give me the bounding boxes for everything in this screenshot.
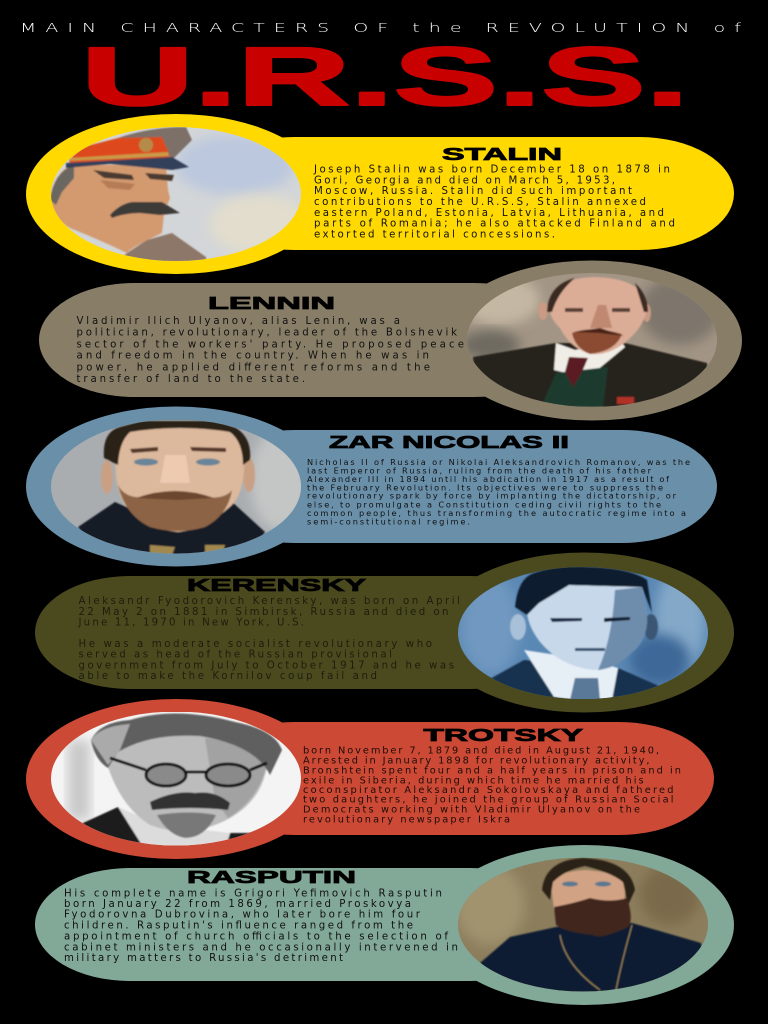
heading: ZAR NICOLAS II bbox=[329, 432, 569, 452]
body text: June 11, 1970 in New York, U.S. bbox=[78, 618, 304, 629]
body text: and freedom in the country. When he was in bbox=[76, 351, 429, 362]
ring bbox=[434, 845, 734, 1005]
ring bbox=[434, 552, 734, 712]
pill bbox=[39, 283, 569, 397]
body text: born November 7, 1879 and died in August 21, 1940, bbox=[303, 746, 659, 757]
pill bbox=[35, 576, 565, 689]
body text: contributions to the U.R.S.S, Stalin annexed bbox=[314, 197, 646, 208]
body text bbox=[313, 165, 675, 240]
body text bbox=[78, 596, 460, 682]
heading: RASPUTIN bbox=[187, 867, 356, 887]
body text bbox=[64, 888, 458, 964]
heading: TROTSKY bbox=[424, 725, 584, 745]
body text: politician, revolutionary, leader of the Bolshevik bbox=[76, 328, 457, 339]
body text: extorted territorial concessions. bbox=[314, 229, 555, 240]
body text: cabinet ministers and he occasionally intervened in bbox=[64, 942, 458, 953]
portrait: Lenin bbox=[460, 273, 720, 407]
body text bbox=[303, 746, 681, 825]
body text: Aleksandr Fyodorovich Kerensky, was born on April bbox=[78, 596, 460, 607]
body text: Alexander III in 1894 until his abdication in 1917 as a result of bbox=[307, 474, 670, 484]
body text: sector of the workers' party. He proposed peace bbox=[76, 339, 464, 350]
body text: common people, thus transforming the autocratic regime into a bbox=[307, 508, 686, 518]
body text: last Emperor of Russia, ruling from the death of his father bbox=[307, 465, 652, 475]
body text: appointment of church officials to the selection of bbox=[64, 931, 448, 942]
pill bbox=[35, 868, 565, 981]
body text: parts of Romania; he also attacked Finland and bbox=[314, 218, 675, 230]
body text: Arrested in January 1898 for revolutionary activity, bbox=[303, 756, 650, 767]
body text: Bronshtein spent four and a half years in prison and in bbox=[303, 766, 681, 777]
ring bbox=[26, 406, 326, 566]
body text: able to make the Kornilov coup fail and bbox=[78, 671, 377, 682]
panel: Trotsky bbox=[26, 699, 714, 859]
body text: Vladimir Ilich Ulyanov, alias Lenin, was a bbox=[76, 316, 400, 327]
pill bbox=[200, 722, 714, 835]
portrait: Rasputin bbox=[455, 858, 710, 992]
title line: MAIN CHARACTERS OF the REVOLUTION of bbox=[20, 20, 750, 35]
body text: revolutionary newspaper Iskra bbox=[303, 814, 510, 825]
body text: children. Rasputin's influence ranged from the bbox=[64, 920, 413, 931]
body text: His complete name is Grigori Yefimovich Rasputin bbox=[64, 888, 442, 899]
body text: exile in Siberia, during which time he married his bbox=[303, 775, 644, 786]
body text: transfer of land to the state. bbox=[76, 374, 305, 385]
body text: Fyodorovna Dubrovina, who later bore him four bbox=[64, 910, 421, 921]
body text: government from July to October 1917 and he was bbox=[78, 660, 454, 671]
ring bbox=[442, 260, 742, 420]
body text: else, to promulgate a Constitution ceding civil rights to the bbox=[307, 499, 661, 509]
portrait: Kerensky bbox=[458, 566, 708, 700]
heading: KERENSKY bbox=[187, 575, 367, 595]
panel: Zar Nicolas II bbox=[26, 406, 717, 566]
body text bbox=[76, 316, 464, 385]
ring bbox=[26, 114, 326, 274]
panel: Kerensky bbox=[35, 552, 734, 712]
body text bbox=[307, 457, 690, 526]
title U.R.S.S.: U.R.S.S. bbox=[81, 30, 689, 123]
title bbox=[20, 20, 750, 123]
body text: coconspirator Aleksandra Sokolovskaya and fathered bbox=[303, 785, 674, 796]
body text: two daughters, he joined the group of Russian Social bbox=[303, 795, 674, 806]
panel: Stalin bbox=[26, 114, 734, 274]
portrait: Nicolas II bbox=[51, 420, 310, 555]
body text: Gori, Georgia and died on March 5, 1953, bbox=[314, 176, 615, 186]
body text: served as head of the Russian provisional bbox=[78, 650, 392, 661]
portrait: Trotsky bbox=[51, 712, 301, 850]
heading: STALIN bbox=[442, 144, 562, 164]
body text: military matters to Russia's detriment bbox=[64, 953, 343, 964]
panel: Rasputin bbox=[35, 845, 734, 1005]
portrait: Stalin bbox=[50, 127, 310, 262]
body text: Moscow, Russia. Stalin did such important bbox=[314, 186, 632, 197]
ring bbox=[26, 699, 326, 859]
panel: Lenin bbox=[39, 260, 742, 420]
body text: Nicholas II of Russia or Nikolai Aleksandrovich Romanov, was the bbox=[307, 457, 690, 467]
body text: He was a moderate socialist revolutionary who bbox=[78, 639, 432, 650]
body text: revolutionary spark by force by implanting the dictatorship, or bbox=[307, 491, 677, 501]
heading: LENNIN bbox=[208, 293, 335, 313]
body text: 22 May 2 on 1881 in Simbirsk, Russia and died on bbox=[78, 607, 449, 618]
body text: born January 22 from 1869, married Proskovya bbox=[64, 899, 411, 910]
body text: semi-constitutional regime. bbox=[307, 516, 470, 526]
body text: Democrats working with Vladimir Ulyanov on the bbox=[303, 804, 640, 815]
body text: Joseph Stalin was born December 18 on 1878 in bbox=[313, 165, 670, 176]
body text: eastern Poland, Estonia, Latvia, Lithuania, and bbox=[314, 208, 664, 219]
body text: power, he applied different reforms and the bbox=[76, 362, 430, 373]
pill bbox=[200, 430, 717, 543]
body text: the February Revolution. Its objectives were to suppress the bbox=[307, 482, 663, 492]
pill bbox=[200, 137, 734, 250]
